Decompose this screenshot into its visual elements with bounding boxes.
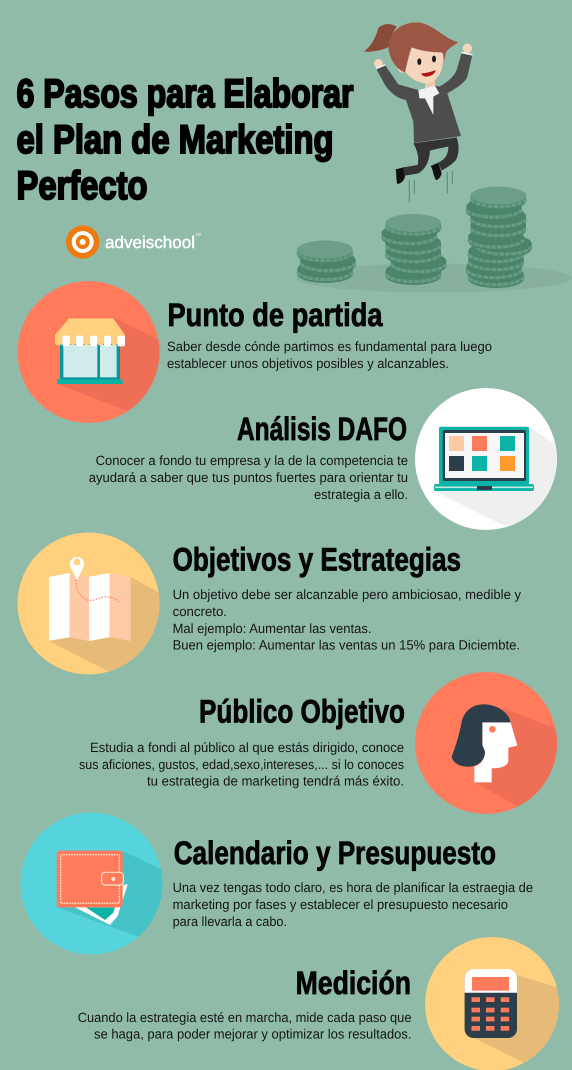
text block: Un objetivo debe ser alcanzable pero ambiciosao, medible y <box>173 587 521 602</box>
panel: publico objetivo <box>79 672 570 815</box>
title: 6 Pasos para Elaborar <box>16 72 354 116</box>
logo: adveischool <box>66 225 201 259</box>
logo: adveischool: TM <box>195 232 201 237</box>
heading: Objetivos y Estrategias <box>173 542 461 578</box>
title <box>16 72 354 208</box>
text block: Mal ejemplo: Aumentar las ventas. <box>173 621 372 636</box>
text block: concreto. <box>173 604 227 619</box>
heading: Análisis DAFO <box>237 411 407 447</box>
text block: estrategia a ello. <box>314 487 408 502</box>
logo: adveischool: adveischool <box>105 233 195 252</box>
text block: Estudia a fondi al público al que estás dirigido, conoce <box>90 740 404 755</box>
heading: Punto de partida <box>168 297 383 333</box>
text block: tu estrategia de marketing tendrá más éxito. <box>147 774 404 788</box>
text block: establecer unos objetivos posibles y alcanzables. <box>167 356 449 371</box>
icon: calculator on yellow circle <box>425 937 566 1070</box>
text block: Una vez tengas todo claro, es hora de planificar la estraegia de <box>173 880 533 895</box>
heading: Medición <box>296 965 411 1001</box>
panel: objetivos y estrategias <box>18 532 521 680</box>
illustration: jumping businesswoman <box>364 22 473 203</box>
text block: sus aficiones, gustos, edad,sexo,intereses,... si lo conoces <box>79 757 404 772</box>
icon: storefront on coral circle <box>18 281 172 423</box>
heading: Calendario y Presupuesto <box>174 835 496 871</box>
icon: wallet on cyan circle <box>20 812 170 954</box>
text block: Saber desde cónde partimos es fundamental para luego <box>167 339 492 354</box>
text block: Buen ejemplo: Aumentar las ventas un 15% para Diciembte. <box>173 638 520 652</box>
text block <box>173 587 521 652</box>
text block <box>89 453 408 502</box>
heading: Público Objetivo <box>199 694 405 730</box>
text block <box>173 880 533 929</box>
illustration: coin stacks <box>296 186 572 292</box>
panel: medicion <box>78 937 566 1070</box>
text block <box>79 740 404 788</box>
icon: head profile on coral circle <box>415 672 570 815</box>
icon: map with pin on yellow circle <box>18 532 160 674</box>
text block: ayudará a saber que tus puntos fuertes para orientar tu <box>89 470 408 485</box>
panel: analisis dafo <box>89 388 566 535</box>
title: el Plan de Marketing <box>16 118 334 162</box>
text block: para llevarla a cabo. <box>173 914 287 929</box>
icon: laptop on white circle <box>415 388 566 535</box>
text block <box>78 1010 411 1042</box>
text block: Conocer a fondo tu empresa y la de la competencia te <box>96 453 408 468</box>
text block: se haga, para poder mejorar y optimizar los resultados. <box>94 1026 412 1042</box>
text block: marketing por fases y establecer el presupuesto necesario <box>173 897 508 912</box>
panel: calendario y presupuesto <box>20 812 533 954</box>
panel: punto de partida <box>18 281 492 423</box>
text block: Cuando la estrategia esté en marcha, mide cada paso que <box>78 1010 411 1025</box>
title: Perfecto <box>16 164 148 208</box>
text block <box>167 339 492 371</box>
